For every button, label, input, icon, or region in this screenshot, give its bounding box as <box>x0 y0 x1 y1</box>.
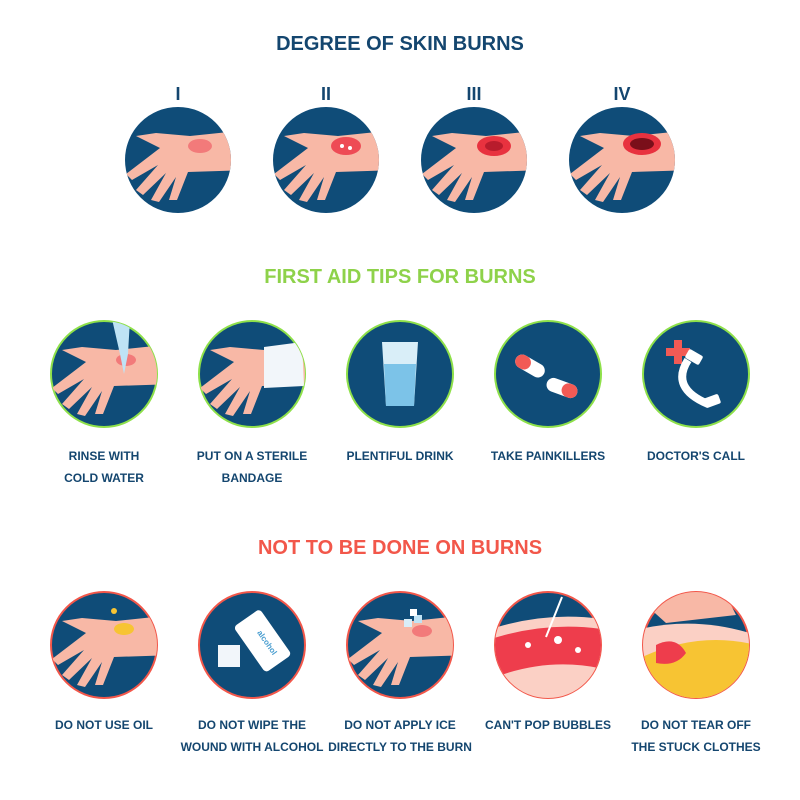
dont: alcohol: alcohol <box>255 629 279 657</box>
dont: clothes: THE STUCK CLOTHES <box>631 740 761 754</box>
dont: alcohol: DO NOT WIPE THE <box>198 718 306 732</box>
tip: painkillers: TAKE PAINKILLERS <box>491 449 605 463</box>
dont: clothes <box>631 592 761 754</box>
tip: rinse: RINSE WITH <box>69 449 139 463</box>
tip: bandage <box>198 320 307 482</box>
degree III <box>421 87 527 213</box>
tip: doctor's call: DOCTOR'S CALL <box>647 449 745 463</box>
dont: bubbles: CAN'T POP BUBBLES <box>485 718 611 732</box>
tip: rinse <box>50 320 158 482</box>
degree I: I <box>175 84 181 104</box>
title: not to be done: NOT TO BE DONE ON BURNS <box>258 537 542 559</box>
tip: painkillers <box>491 321 605 463</box>
first aid row <box>51 319 749 485</box>
dont: ice: DO NOT APPLY ICE <box>344 718 456 732</box>
dont: ice <box>328 592 472 754</box>
title: degree of skin burns: DEGREE OF SKIN BURNS <box>276 33 524 55</box>
degree I <box>125 87 231 213</box>
not to do row <box>51 592 761 754</box>
dont: oil <box>50 591 158 729</box>
tip: bandage: PUT ON A STERILE <box>197 449 307 463</box>
degree IV <box>569 87 675 213</box>
title: first aid tips: FIRST AID TIPS FOR BURNS <box>264 266 536 288</box>
dont: oil: DO NOT USE OIL <box>55 718 153 732</box>
dont: ice: DIRECTLY TO THE BURN <box>328 740 472 754</box>
degree II <box>273 87 379 213</box>
tip: drink <box>346 321 454 463</box>
tip: drink: PLENTIFUL DRINK <box>346 449 454 463</box>
degree II: II <box>321 84 331 104</box>
dont: bubbles <box>485 592 611 732</box>
dont: alcohol: WOUND WITH ALCOHOL <box>181 740 323 754</box>
tip: rinse: COLD WATER <box>64 471 144 485</box>
degree IV: IV <box>613 84 631 104</box>
dont: alcohol <box>181 592 323 754</box>
degree row <box>125 84 692 213</box>
degree III: III <box>466 84 482 104</box>
tip: doctor's call <box>643 321 749 463</box>
tip: bandage: BANDAGE <box>222 471 282 485</box>
dont: clothes: DO NOT TEAR OFF <box>641 718 751 732</box>
